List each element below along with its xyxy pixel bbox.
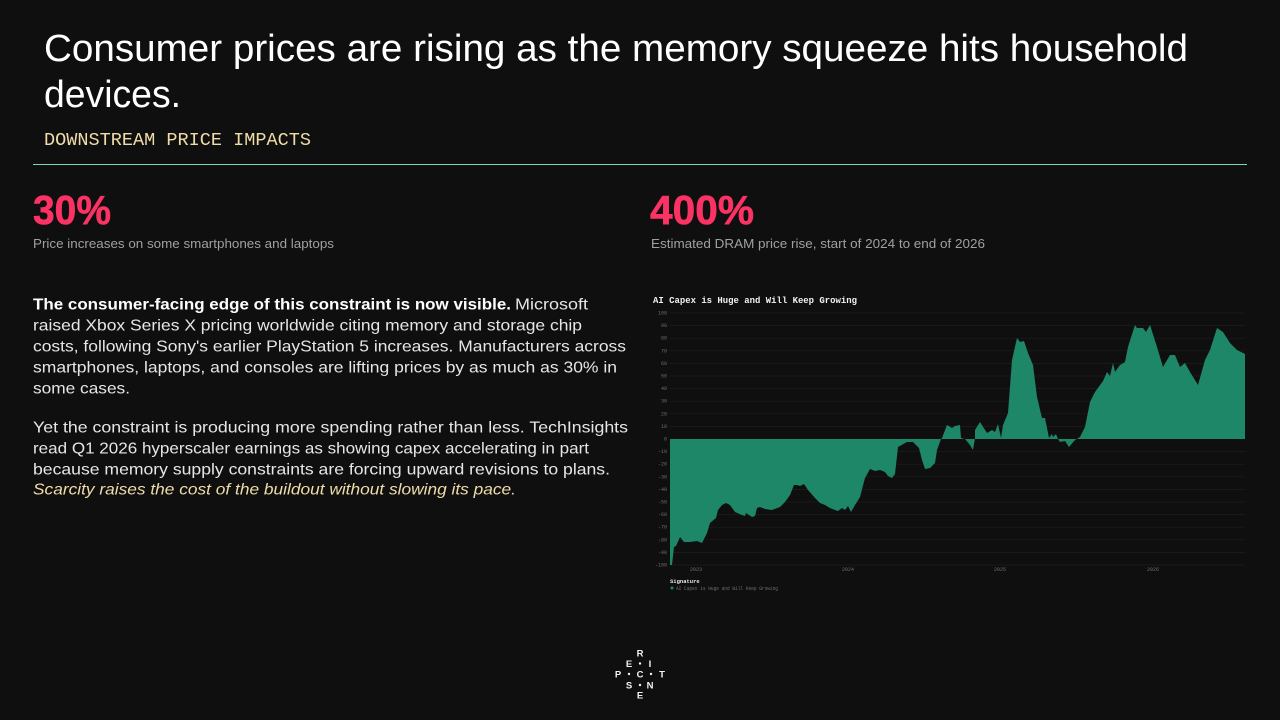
text block: consumer-facing edge: smartphones, laptops, and consoles are lifting prices by as much as 30% in	[33, 360, 617, 376]
y axis labels: -40	[658, 487, 667, 493]
legend: AI Capex is Huge and Will Keep Growing	[676, 586, 778, 592]
text block: constraint spending: because memory supply constraints are forcing upward revisions to plans.	[33, 462, 610, 478]
y axis labels: -50	[658, 500, 667, 506]
x axis labels: 2023	[690, 567, 702, 573]
logo: letter diamond: R	[637, 648, 644, 660]
text block: constraint spending: Scarcity raises the cost of the buildout without slowing its pace.	[33, 482, 516, 498]
x axis labels: 2024	[842, 567, 854, 573]
title: Consumer prices are rising as the memory squeeze hits household	[44, 28, 1188, 70]
x axis labels: 2025	[994, 567, 1006, 573]
y axis labels: -100	[655, 562, 667, 568]
text block: consumer-facing edge	[33, 296, 626, 398]
logo: letter diamond: E	[626, 659, 632, 670]
logo: letter diamond	[615, 648, 665, 702]
y axis labels	[655, 310, 667, 568]
chart title: AI Capex is Huge and Will Keep Growing	[653, 295, 857, 306]
text block: consumer-facing edge: The consumer-facing edge of this constraint is now visible.	[33, 296, 511, 314]
y axis labels: 0	[664, 436, 667, 442]
legend	[670, 578, 778, 592]
title	[44, 28, 1188, 116]
y axis labels: -30	[658, 474, 667, 480]
text block: constraint spending: read Q1 2026 hyperscaler earnings as showing capex accelerating in part	[33, 440, 590, 458]
y axis labels: -80	[658, 537, 667, 543]
y axis labels: -20	[658, 462, 667, 468]
stat: 400%: Estimated DRAM price rise, start of 2024 to end of 2026	[651, 237, 985, 251]
logo: letter diamond: N	[647, 680, 654, 692]
stat: 30%	[33, 187, 334, 251]
area series	[670, 325, 1245, 565]
y axis labels: -70	[658, 525, 667, 531]
y axis labels: 80	[661, 336, 667, 342]
y axis labels: 60	[661, 361, 667, 367]
subtitle: DOWNSTREAM PRICE IMPACTS	[44, 130, 311, 151]
chart: AI capex area chart	[653, 295, 1245, 592]
y axis labels: 40	[661, 386, 667, 392]
text block: consumer-facing edge: raised Xbox Series X pricing worldwide citing memory and storage chip	[33, 318, 582, 334]
text block: constraint spending	[33, 420, 628, 498]
text block: consumer-facing edge: costs, following Sony's earlier PlayStation 5 increases. Manufacturers across	[33, 338, 626, 356]
y axis labels: 20	[661, 411, 667, 417]
stat: 400%	[650, 187, 985, 251]
text block: consumer-facing edge: some cases.	[33, 380, 130, 398]
logo: letter diamond: S	[626, 680, 632, 692]
logo: letter diamond: T	[659, 670, 665, 680]
y axis labels: -90	[658, 550, 667, 556]
stat: 30%: 30%	[33, 187, 111, 233]
stat: 30%: Price increases on some smartphones and laptops	[33, 237, 334, 251]
logo: letter diamond: P	[615, 670, 622, 680]
logo: letter diamond: E	[637, 690, 643, 702]
stat: 400%: 400%	[650, 187, 754, 233]
text block: consumer-facing edge: Microsoft	[515, 296, 589, 314]
logo: letter diamond: I	[649, 659, 651, 670]
text block: constraint spending: Yet the constraint is producing more spending rather than less. TechInsights	[33, 420, 628, 436]
y axis labels: 10	[661, 424, 667, 430]
x axis labels: 2026	[1147, 567, 1159, 573]
legend: Signature	[670, 578, 700, 585]
logo: letter diamond: C	[637, 670, 644, 680]
y axis labels: 70	[661, 348, 667, 354]
y axis labels: 90	[661, 323, 667, 329]
title: devices.	[44, 74, 181, 116]
y axis labels: 100	[658, 310, 667, 316]
y axis labels: 50	[661, 374, 667, 380]
y axis labels: -10	[658, 449, 667, 455]
y axis labels: 30	[661, 399, 667, 405]
y axis labels: -60	[658, 512, 667, 518]
x axis labels	[690, 567, 1159, 573]
